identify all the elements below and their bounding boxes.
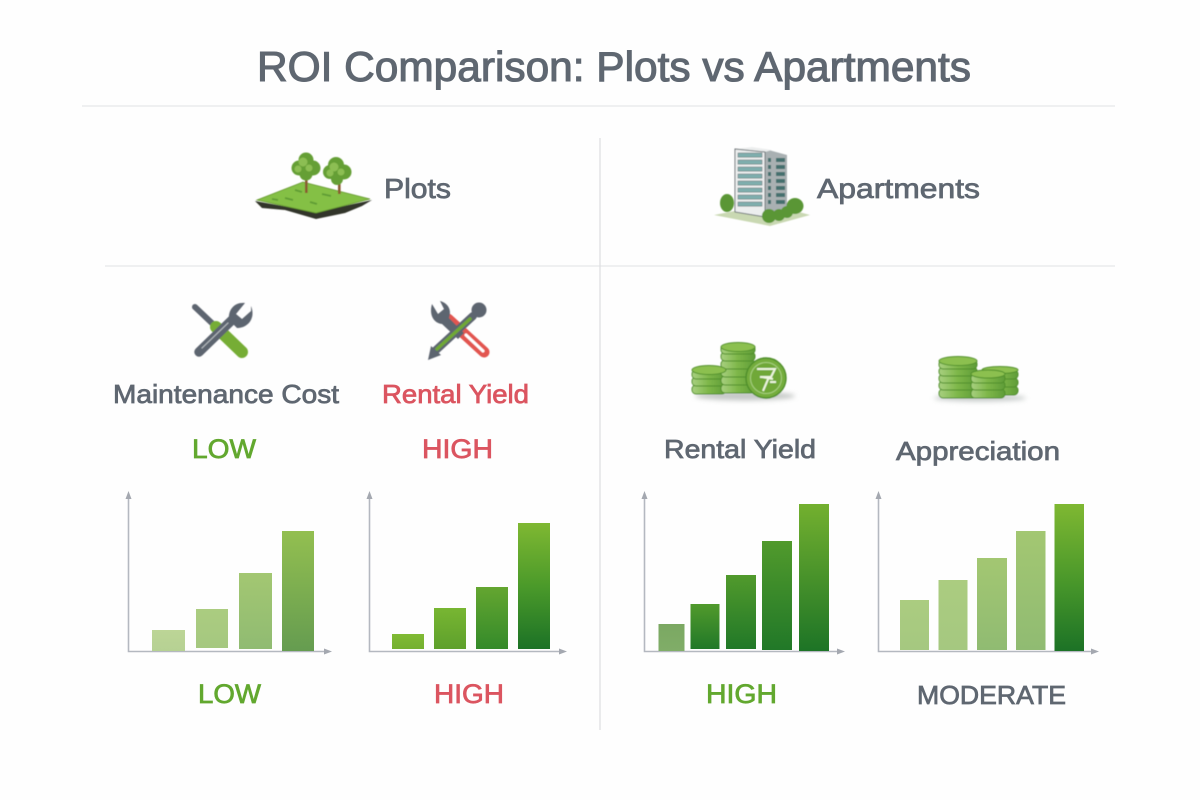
label: Appreciation: Appreciation [896, 436, 1060, 466]
panel: plots header [255, 152, 451, 219]
panel: apartments header [714, 147, 980, 226]
icon: coin stacks with rupee coin [692, 342, 795, 400]
panel: maintenance cost [113, 303, 340, 709]
title: ROI Comparison: Plots vs Apartments [257, 43, 971, 90]
icon: grass plot with trees [255, 152, 372, 219]
result: MODERATE: MODERATE [917, 680, 1066, 710]
panel: appreciation [876, 356, 1099, 710]
icon: red tools [428, 301, 486, 360]
panel: plots rental yield [366, 301, 567, 709]
rating: HIGH: HIGH [422, 434, 493, 464]
bar chart: apartments rental yield [642, 491, 845, 654]
icon: apartment building [714, 147, 810, 226]
result: HIGH: HIGH [434, 679, 504, 709]
label: Rental Yield (red): Rental Yield [382, 379, 529, 409]
bar chart: plots rental yield [366, 491, 567, 654]
icon: green tools [195, 303, 253, 352]
icon: coin stacks [934, 356, 1026, 402]
label: Rental Yield: Rental Yield [664, 434, 816, 464]
bar chart: maintenance cost [126, 491, 332, 654]
heading: Apartments: Apartments [817, 173, 980, 204]
heading: Plots: Plots [384, 173, 451, 204]
label: Maintenance Cost: Maintenance Cost [113, 379, 340, 409]
result: LOW: LOW [198, 679, 262, 709]
panel: apartments rental yield [642, 342, 845, 709]
bar chart: appreciation [876, 491, 1099, 654]
rating: LOW: LOW [192, 434, 257, 464]
result: HIGH: HIGH [706, 679, 777, 709]
